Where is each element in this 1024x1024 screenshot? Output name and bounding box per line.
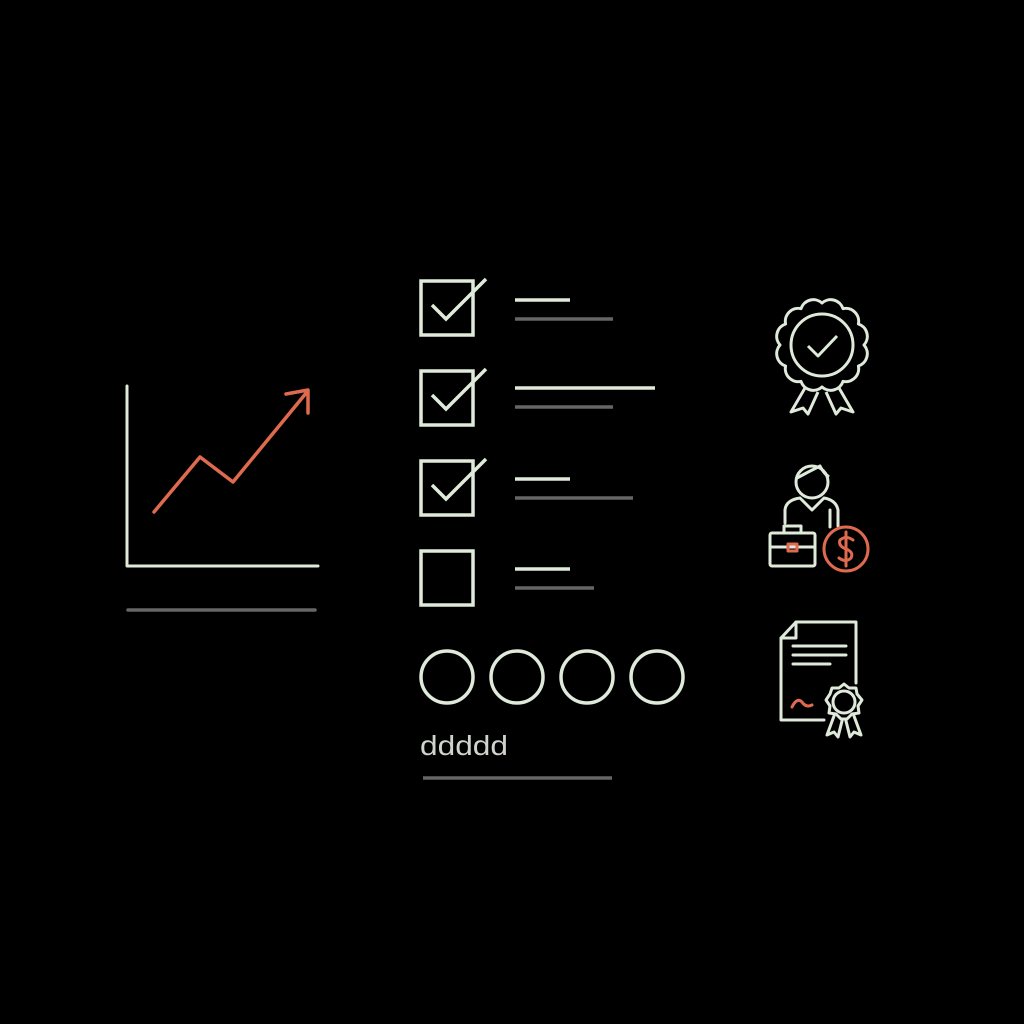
chart caption line — [128, 608, 315, 612]
icon: award badge — [777, 300, 867, 414]
chart axes — [127, 386, 318, 566]
checklist — [421, 279, 655, 605]
label underline — [423, 776, 612, 780]
checklist item 4 (unchecked) — [421, 551, 594, 605]
checklist item 1 — [421, 279, 613, 335]
trend line arrow — [154, 390, 308, 512]
checklist item 2 — [421, 369, 655, 425]
rating circles — [421, 651, 683, 703]
label text: ddddd — [420, 730, 508, 761]
checklist item 3 — [421, 459, 633, 515]
icon: businessperson with briefcase and dollar — [770, 466, 868, 571]
chart: line graph — [127, 386, 318, 610]
icon: certificate document — [781, 622, 862, 737]
